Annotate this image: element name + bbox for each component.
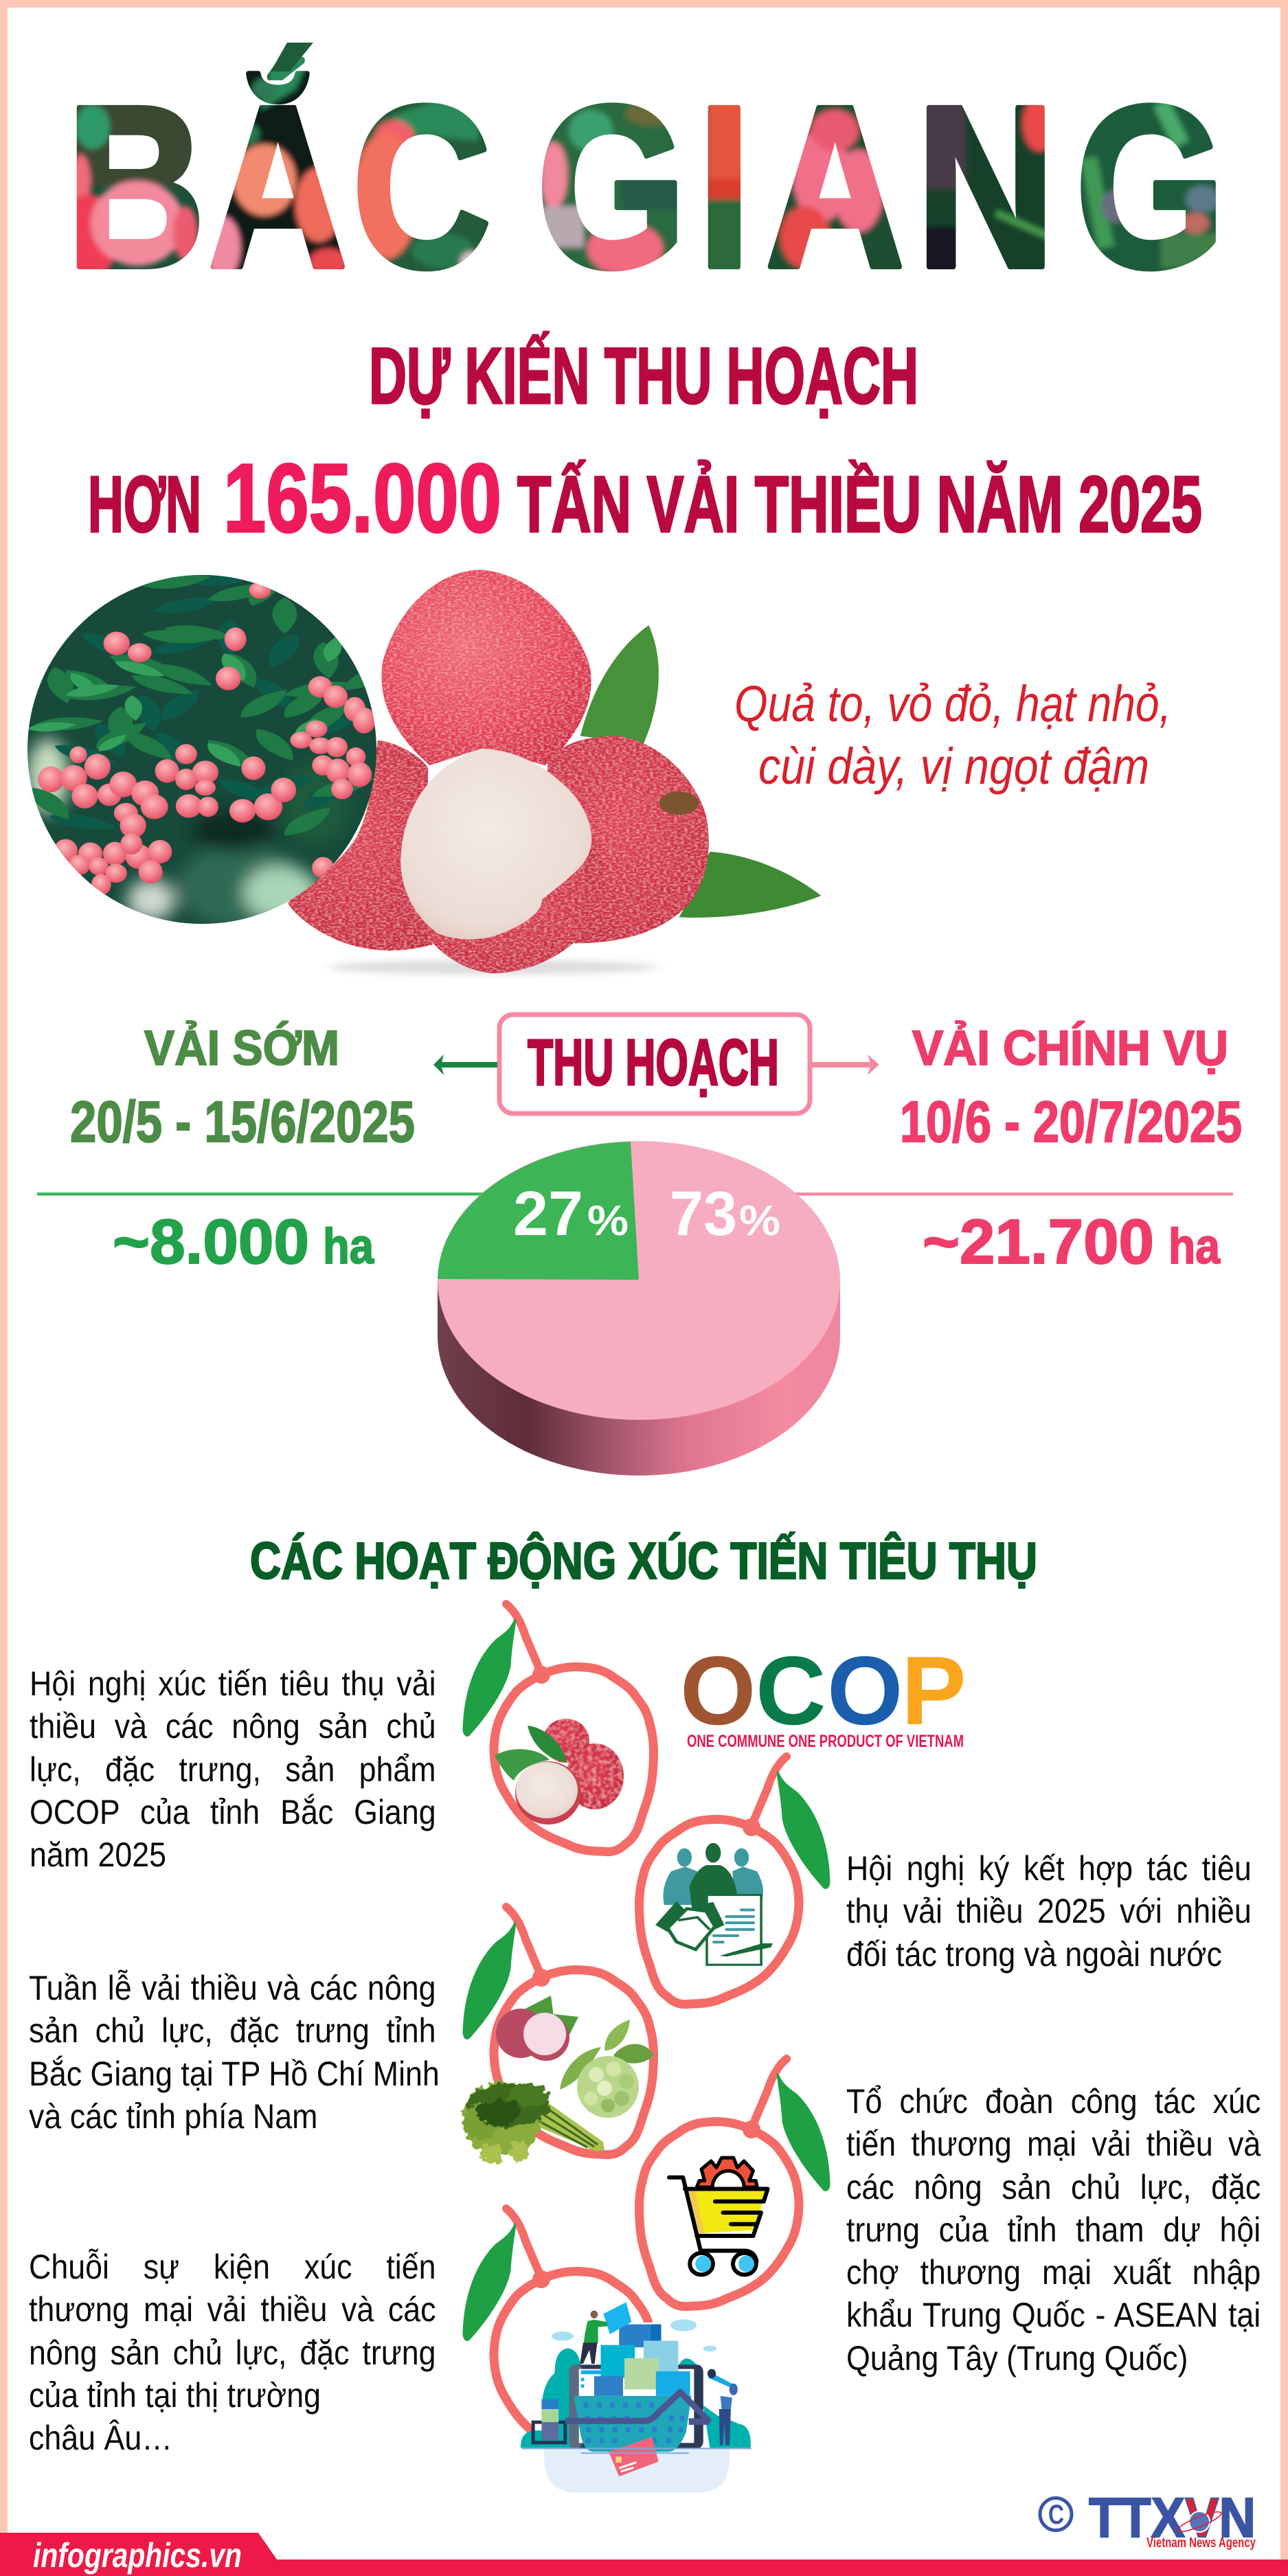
icon: e-commerce basket bbox=[521, 2303, 752, 2493]
paragraph: trade delegation: chợ thương mại xuất nhập bbox=[846, 2253, 1261, 2292]
logo: TTXVN: TTXVN bbox=[1089, 2487, 1256, 2549]
label: 73 percent: 73 bbox=[670, 1179, 737, 1249]
tagline line one: Quả to, vỏ đỏ, hạt nhỏ, bbox=[734, 675, 1171, 732]
icon: shopping cart bbox=[669, 2158, 768, 2274]
paragraph: lychee week bbox=[29, 1969, 440, 2136]
harvest box bbox=[499, 1015, 810, 1114]
label: 73 percent bbox=[670, 1179, 780, 1249]
paragraph: trade delegation: các nông sản chủ lực, đặc bbox=[846, 2168, 1261, 2206]
word: HƠN: HƠN bbox=[88, 460, 201, 549]
area: main season: ha bbox=[1168, 1219, 1221, 1274]
fruit frame five bbox=[464, 2208, 653, 2456]
agency name: Vietnam News Agency bbox=[1146, 2535, 1256, 2551]
logo: OCOP: O bbox=[827, 1636, 903, 1745]
footer ribbon bbox=[0, 2533, 1288, 2576]
icon: produce bbox=[462, 1996, 654, 2163]
label: 73 percent: % bbox=[739, 1197, 780, 1245]
logo: OCOP: C bbox=[756, 1636, 826, 1745]
paragraph: trade delegation: Quảng Tây (Trung Quốc) bbox=[846, 2339, 1188, 2377]
paragraph: trade delegation: Tổ chức đoàn công tác xúc bbox=[846, 2082, 1261, 2121]
orchard photo circle bbox=[27, 575, 376, 924]
label: 27 percent: 27 bbox=[513, 1179, 583, 1249]
paragraph: lychee week: sản chủ lực, đặc trưng tỉnh bbox=[29, 2011, 436, 2050]
fruit frame four bbox=[640, 2059, 829, 2307]
label: 27 percent: % bbox=[587, 1197, 629, 1245]
paragraph: lychee week: Tuần lễ vải thiều và các nông bbox=[29, 1969, 436, 2007]
paragraph: trade delegation: trưng của tỉnh tham dự hội bbox=[846, 2211, 1261, 2249]
leaf: upper bbox=[580, 625, 659, 745]
logo: OCOP bbox=[680, 1636, 967, 1751]
quality tagline bbox=[734, 675, 1171, 795]
lychee fruit photo bbox=[287, 569, 822, 975]
logo: OCOP: O bbox=[680, 1636, 756, 1745]
custard apple illustration bbox=[560, 2020, 654, 2118]
icon: business partners bbox=[655, 1843, 773, 1965]
title: photo-filled letters: BẮC GIANG bbox=[66, 58, 1225, 316]
subtitle line one: DỰ KIẾN THU HOẠCH bbox=[369, 331, 918, 420]
paragraph: trade delegation: khẩu Trung Quốc - ASEAN tại bbox=[846, 2296, 1261, 2334]
paragraph: lychee week: Bắc Giang tại TP Hồ Chí Minh bbox=[29, 2055, 440, 2093]
person with spyglass bbox=[708, 2369, 738, 2445]
main-season lychee heading bbox=[900, 1021, 1242, 1154]
label: 27 percent bbox=[513, 1179, 629, 1249]
paragraph: trade delegation bbox=[846, 2082, 1261, 2377]
globe emblem bbox=[1176, 2509, 1223, 2535]
fruit frame two bbox=[640, 1756, 829, 2004]
pie chart bbox=[438, 1141, 840, 1476]
fruit: top bbox=[381, 569, 591, 765]
fruit: right bbox=[547, 736, 709, 943]
dates: early lychee: 20/5 - 15/6/2025 bbox=[70, 1089, 415, 1154]
copyright mark: C bbox=[1048, 2500, 1064, 2530]
fruit: left bbox=[287, 740, 433, 951]
logo: OCOP: P bbox=[901, 1636, 967, 1745]
paragraph: conference left one: Hội nghị xúc tiến tiêu thụ vải bbox=[30, 1664, 436, 1703]
fruit frame one bbox=[464, 1604, 653, 1852]
paragraph: signing conference: đối tác trong và ngoài nước bbox=[846, 1935, 1222, 1974]
area: early lychee: ~8.000 bbox=[113, 1207, 309, 1277]
paragraph: signing conference: Hội nghị ký kết hợp tác tiêu bbox=[846, 1849, 1252, 1888]
paragraph: conference left one: OCOP của tỉnh Bắc Giang bbox=[30, 1793, 436, 1831]
area: main season: ~21.700 bbox=[923, 1207, 1154, 1277]
fruit frame three bbox=[464, 1907, 653, 2155]
paragraph: signing conference bbox=[846, 1849, 1252, 1974]
fruit: peeled front rim bbox=[408, 841, 603, 973]
paragraph: conference left one bbox=[30, 1664, 436, 1874]
harvest box: THU HOẠCH bbox=[528, 1026, 779, 1099]
subtitle line two bbox=[88, 444, 1202, 553]
label: early lychee: VẢI SỚM bbox=[144, 1021, 339, 1076]
paragraph: Europe events: của tỉnh tại thị trường bbox=[29, 2376, 321, 2415]
heading: promotion activities: CÁC HOẠT ĐỘNG XÚC TIẾN TIÊU THỤ bbox=[250, 1532, 1037, 1590]
leaf: lower right bbox=[679, 852, 822, 918]
paragraph: Europe events: châu Âu… bbox=[29, 2419, 172, 2457]
paragraph: Europe events: thương mại vải thiều và các bbox=[29, 2290, 436, 2329]
copyright mark bbox=[1040, 2498, 1072, 2531]
paragraph: Europe events: Chuỗi sự kiện xúc tiến bbox=[29, 2248, 436, 2286]
paragraph: conference left one: thiều và các nông sản chủ bbox=[30, 1707, 436, 1745]
lychee illustration bbox=[496, 1996, 578, 2061]
paragraph: conference left one: lực, đặc trưng, sản phẩm bbox=[30, 1750, 436, 1789]
tagline line two: cùi dày, vị ngọt đậm bbox=[758, 738, 1149, 795]
paragraph: Europe events bbox=[29, 2248, 436, 2457]
fruit: white flesh bbox=[400, 749, 591, 939]
early lychee heading bbox=[70, 1021, 415, 1154]
footer site name: infographics.vn bbox=[33, 2536, 242, 2575]
paragraph: conference left one: năm 2025 bbox=[30, 1835, 166, 1874]
paragraph: signing conference: thụ vải thiều 2025 với nhiều bbox=[846, 1892, 1252, 1930]
paragraph: Europe events: nông sản chủ lực, đặc trưng bbox=[29, 2334, 436, 2372]
area: early lychee: ha bbox=[323, 1219, 374, 1274]
label: main season: VẢI CHÍNH VỤ bbox=[912, 1021, 1228, 1076]
arrow: left to early lychee bbox=[433, 1054, 497, 1075]
number: 165.000: 165.000 bbox=[223, 444, 501, 553]
logo tagline: ONE COMMUNE ONE PRODUCT OF VIETNAM bbox=[687, 1732, 964, 1751]
arrow: right to main-season lychee bbox=[812, 1054, 879, 1075]
icon: lychees bbox=[495, 1719, 624, 1824]
herb bundle illustration bbox=[462, 2081, 605, 2163]
person pushing box bbox=[580, 2311, 607, 2364]
paragraph: lychee week: và các tỉnh phía Nam bbox=[29, 2097, 317, 2136]
paragraph: trade delegation: tiến thương mại vải thiều và bbox=[846, 2125, 1261, 2163]
